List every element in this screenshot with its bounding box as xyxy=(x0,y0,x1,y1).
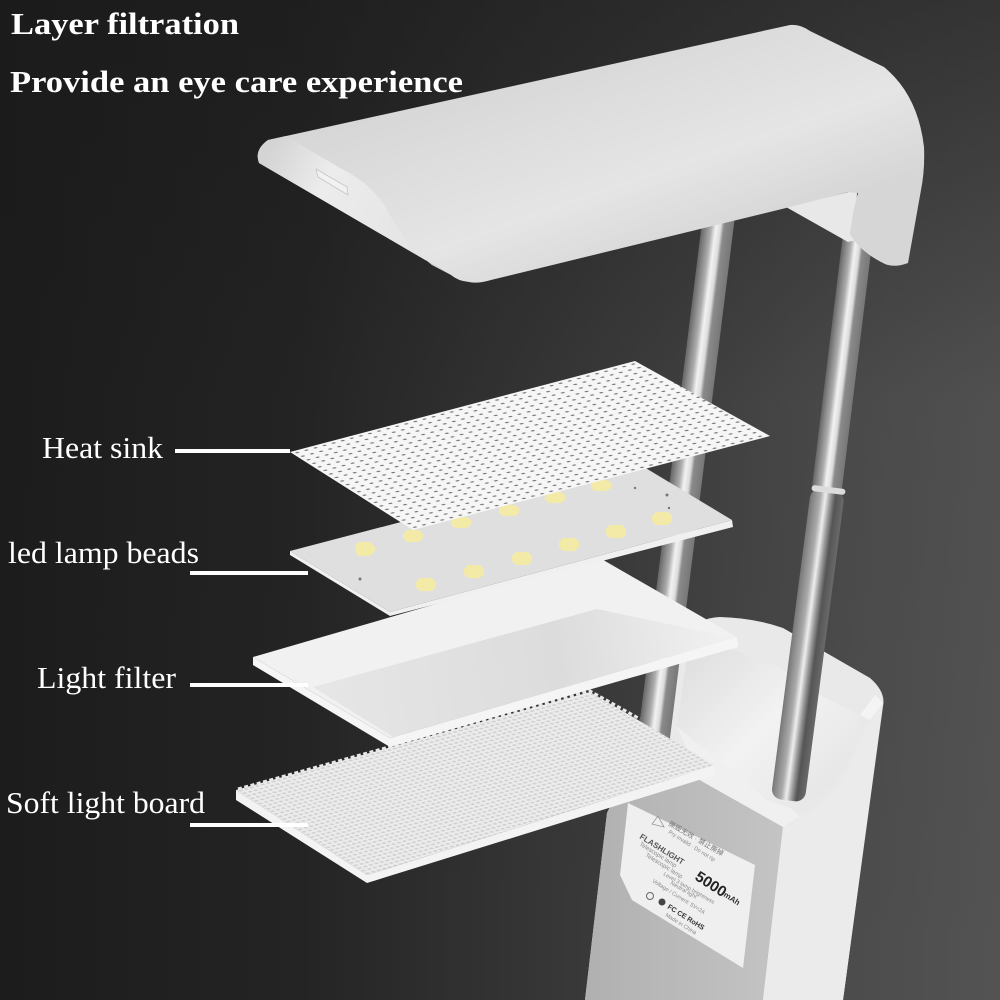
right telescopic rod xyxy=(771,233,873,803)
layer: light filter xyxy=(253,557,738,747)
head shell xyxy=(258,25,924,283)
underside of head xyxy=(786,190,857,242)
label: soft light board xyxy=(6,785,308,827)
label: led lamp beads: led lamp beads xyxy=(8,535,199,570)
label: heat sink xyxy=(42,430,290,465)
layer: soft light board xyxy=(236,691,715,883)
head end cap xyxy=(258,136,451,275)
title: layer filtration: Provide an eye care experience xyxy=(10,64,463,99)
battery label: Telescopic lamp xyxy=(638,842,678,870)
head switch xyxy=(316,169,348,195)
battery label: Telescopic lamp xyxy=(644,853,684,881)
battery label: Voltage / Current: 5V=2A xyxy=(651,879,706,916)
battery label: Made in China xyxy=(664,913,698,937)
lamp head xyxy=(258,25,924,283)
label: light filter xyxy=(37,660,308,695)
battery label: 撕毁无效 · 禁止撕掉 xyxy=(667,819,725,858)
label: led lamp beads xyxy=(8,535,308,575)
battery label: Neutral light xyxy=(669,881,698,901)
label: heat sink: Heat sink xyxy=(42,430,164,465)
layer: led lamp board xyxy=(290,461,733,616)
title: layer filtration: Layer filtration xyxy=(11,6,239,41)
battery label: Pry invalid · Do not rip xyxy=(667,830,716,863)
battery label: FLASHLIGHT xyxy=(638,832,686,867)
led beads xyxy=(355,480,672,591)
battery label xyxy=(620,803,755,968)
label: soft light board: Soft light board xyxy=(6,785,205,820)
board screw holes xyxy=(358,487,670,580)
battery label: FC CE RoHS xyxy=(666,904,706,932)
label: light filter: Light filter xyxy=(37,660,177,695)
battery label: 5000 xyxy=(692,868,730,901)
lamp base xyxy=(585,617,883,1000)
battery label: mAh xyxy=(722,890,742,907)
title: layer filtration xyxy=(10,6,463,99)
layer: heat sink xyxy=(290,361,770,530)
left telescopic rod xyxy=(638,213,735,743)
battery label: Level 3 lamp brightness xyxy=(662,872,716,906)
